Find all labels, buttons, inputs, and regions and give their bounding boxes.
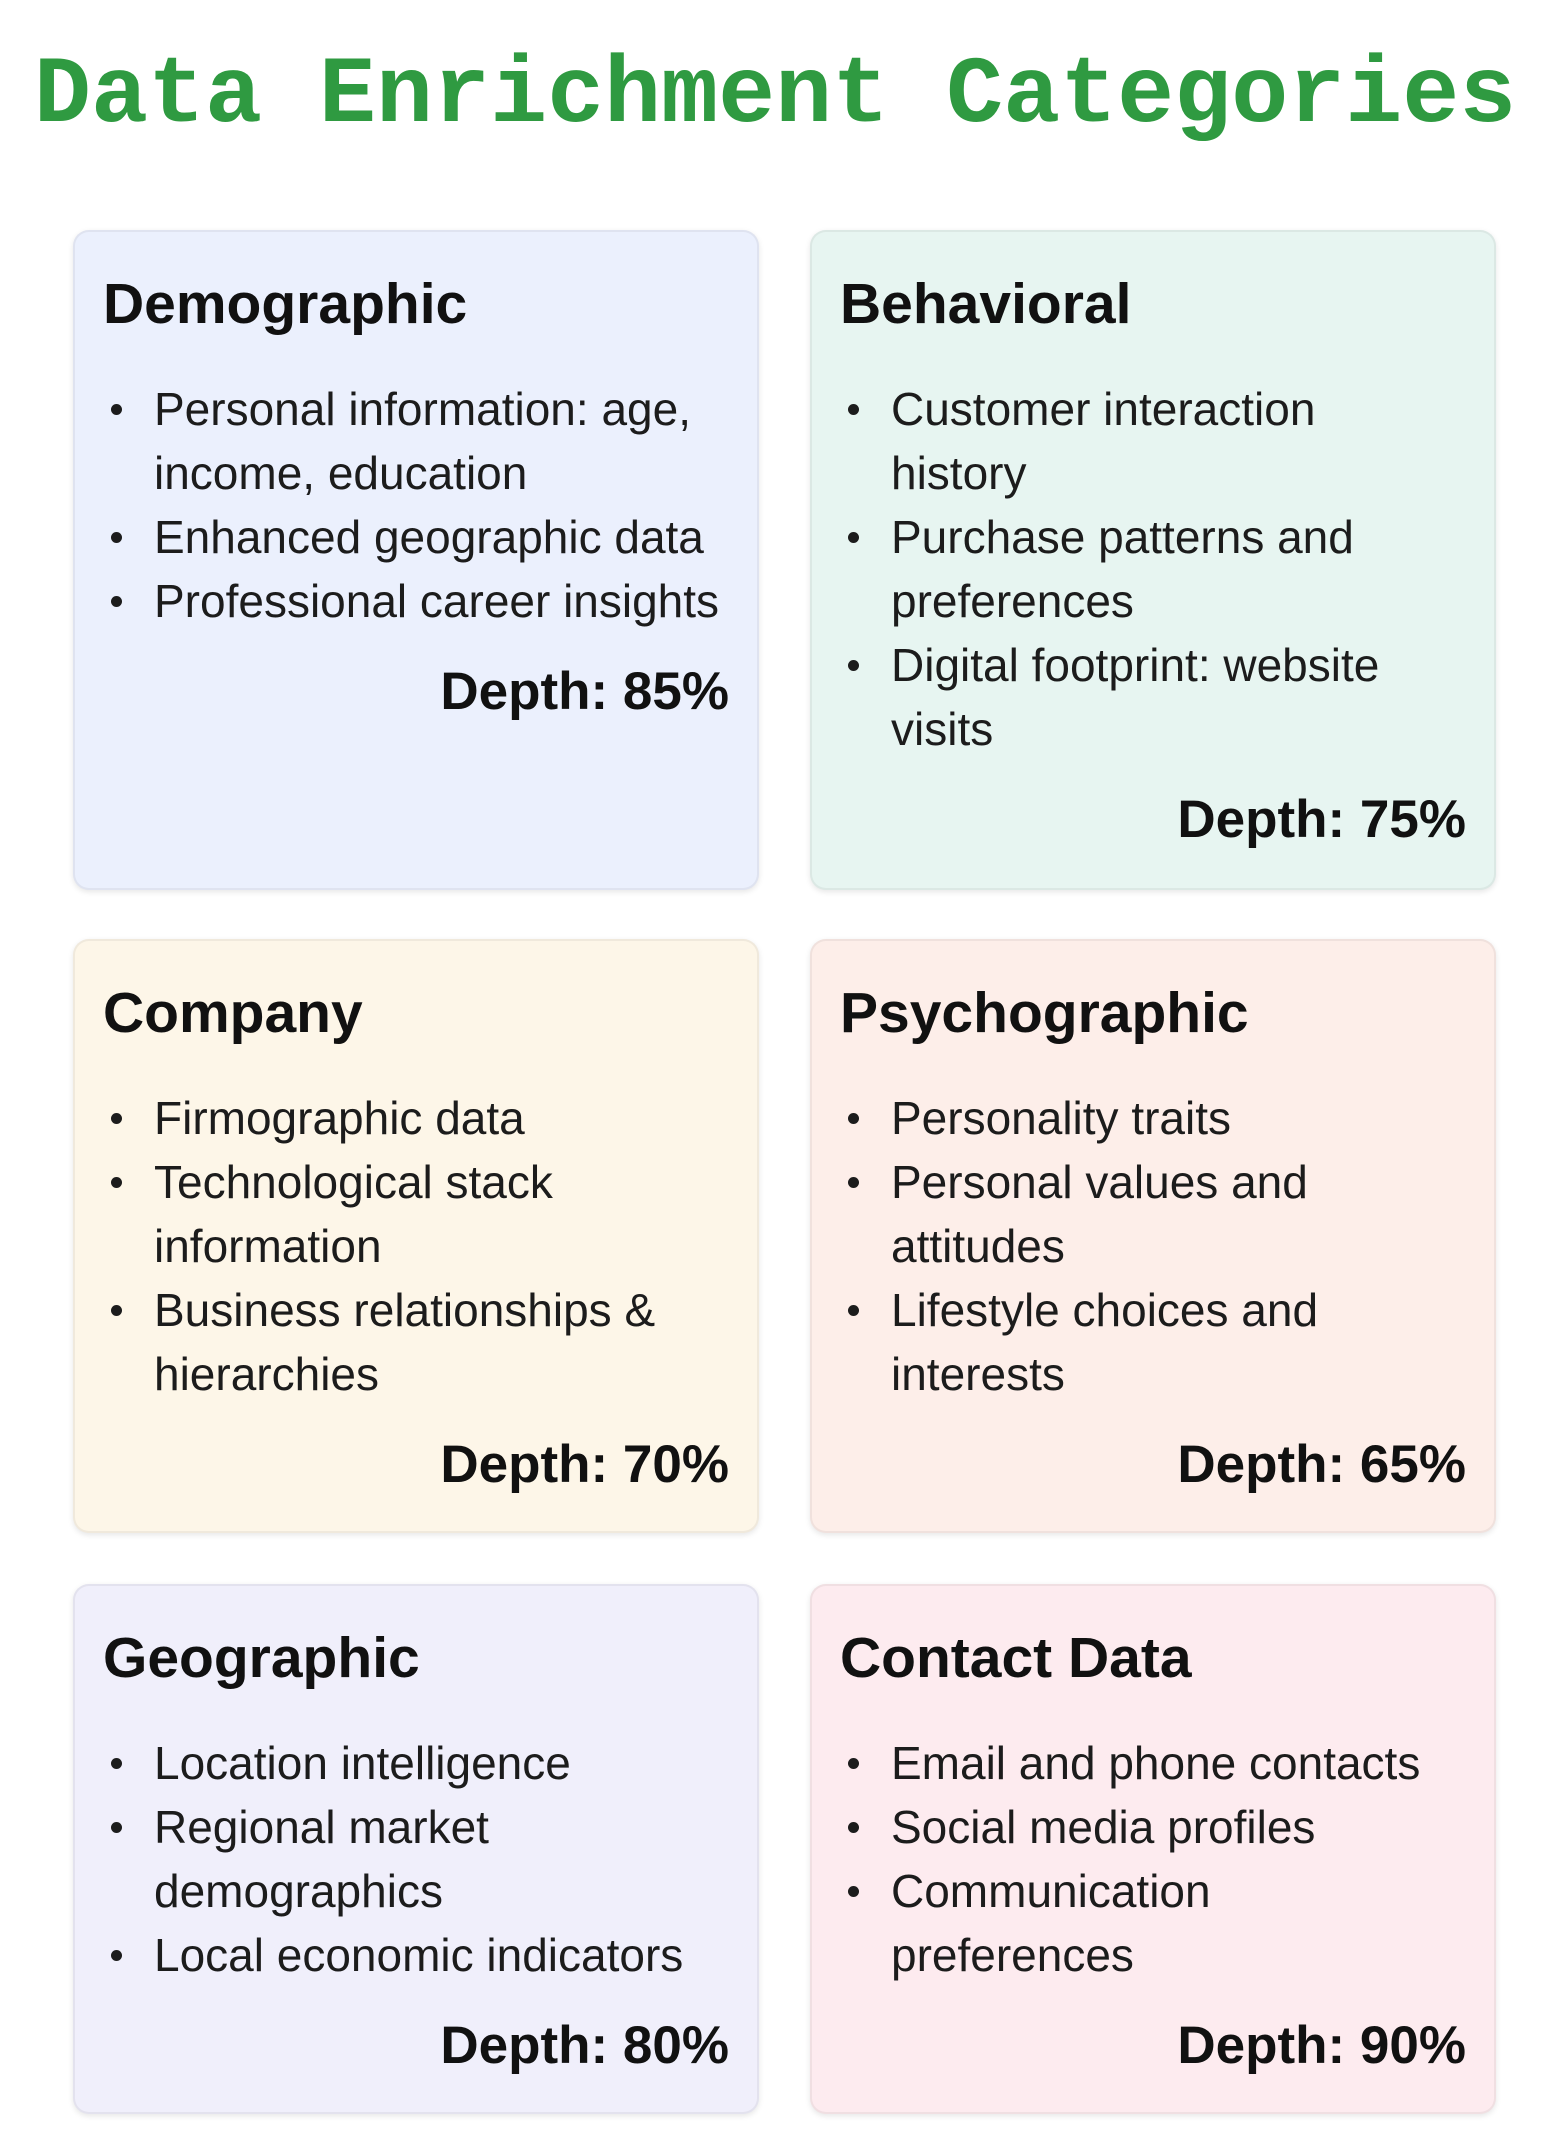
list: geographic items: demographics xyxy=(154,1865,443,1917)
list: company items xyxy=(111,1092,655,1400)
list: company items: Firmographic data xyxy=(154,1092,525,1144)
list: behavioral items: preferences xyxy=(891,575,1134,627)
list: contact items xyxy=(848,1737,1420,1981)
panel: company xyxy=(73,939,759,1533)
depth: psychographic: Depth: 65% xyxy=(1177,1435,1466,1494)
list: demographic items: Personal information: age, xyxy=(154,383,691,435)
depth: geographic: Depth: 80% xyxy=(440,2016,729,2075)
list: psychographic items: Personal values and xyxy=(891,1156,1308,1208)
panel: behavioral xyxy=(810,230,1496,890)
list: contact items: Email and phone contacts xyxy=(891,1737,1420,1789)
list: behavioral items: Customer interaction xyxy=(891,383,1315,435)
panel: demographic xyxy=(73,230,759,890)
heading: demographic: Demographic xyxy=(103,272,467,336)
heading: company: Company xyxy=(103,981,363,1045)
list: demographic items xyxy=(111,383,719,627)
list: demographic items: Professional career insights xyxy=(154,575,719,627)
list: demographic items: income, education xyxy=(154,447,527,499)
list: psychographic items xyxy=(848,1092,1318,1400)
list: company items: hierarchies xyxy=(154,1348,379,1400)
list: behavioral items: Purchase patterns and xyxy=(891,511,1354,563)
list: behavioral items: history xyxy=(891,447,1026,499)
list: psychographic items: attitudes xyxy=(891,1220,1065,1272)
panel: geographic xyxy=(73,1584,759,2114)
list: psychographic items: Personality traits xyxy=(891,1092,1231,1144)
list: demographic items: Enhanced geographic data xyxy=(154,511,704,563)
list: behavioral items: Digital footprint: website xyxy=(891,639,1379,691)
depth: demographic: Depth: 85% xyxy=(440,662,729,721)
list: psychographic items: interests xyxy=(891,1348,1065,1400)
panel: contact data xyxy=(810,1584,1496,2114)
panel: psychographic xyxy=(810,939,1496,1533)
list: geographic items: Location intelligence xyxy=(154,1737,571,1789)
list: psychographic items: Lifestyle choices and xyxy=(891,1284,1318,1336)
list: contact items: preferences xyxy=(891,1929,1134,1981)
heading: behavioral: Behavioral xyxy=(840,272,1131,336)
list: company items: information xyxy=(154,1220,382,1272)
depth: contact data: Depth: 90% xyxy=(1177,2016,1466,2075)
heading: contact data: Contact Data xyxy=(840,1626,1192,1690)
list: company items: Business relationships & xyxy=(154,1284,655,1336)
depth: behavioral: Depth: 75% xyxy=(1177,790,1466,849)
list: contact items: Communication xyxy=(891,1865,1211,1917)
heading: geographic: Geographic xyxy=(103,1626,420,1690)
list: behavioral items: visits xyxy=(891,703,993,755)
list: geographic items xyxy=(111,1737,683,1981)
list: geographic items: Regional market xyxy=(154,1801,489,1853)
list: behavioral items xyxy=(848,383,1379,755)
depth: company: Depth: 70% xyxy=(440,1435,729,1494)
list: contact items: Social media profiles xyxy=(891,1801,1315,1853)
title: Data Enrichment Categories xyxy=(34,42,1516,150)
list: company items: Technological stack xyxy=(154,1156,553,1208)
heading: psychographic: Psychographic xyxy=(840,981,1249,1045)
list: geographic items: Local economic indicators xyxy=(154,1929,683,1981)
